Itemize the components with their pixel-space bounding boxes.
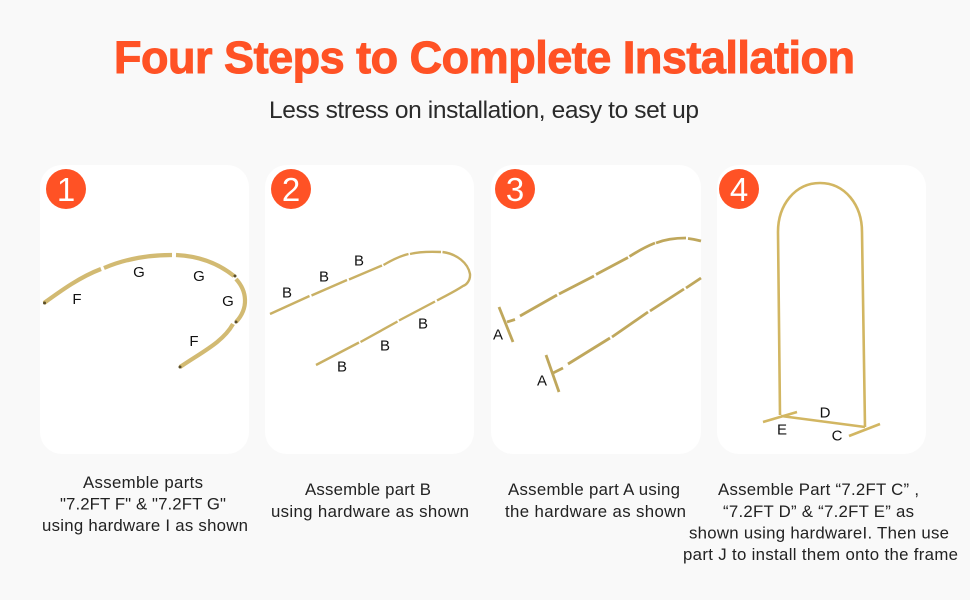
caption: step 4: Assemble Part “7.2FT C” , — [718, 480, 919, 499]
part labels: G — [193, 268, 205, 285]
caption: step 2: using hardware as shown — [271, 502, 469, 521]
panel: step 3 — [491, 165, 701, 454]
part labels: F — [189, 333, 199, 350]
diagram: parts F and G — [43, 255, 245, 368]
caption: step 3: Assemble part A using — [508, 480, 680, 499]
subtitle: Less stress on installation, easy to set up — [269, 97, 699, 124]
badge: step 4 — [719, 169, 759, 209]
caption: step 3: the hardware as shown — [505, 502, 686, 521]
part labels: G — [133, 264, 145, 281]
caption: step 4: “7.2FT D” & “7.2FT E” as — [723, 502, 914, 521]
diagram: part A — [499, 238, 701, 392]
part labels: B — [319, 268, 329, 286]
part labels: F — [72, 291, 82, 308]
part labels: B — [282, 284, 292, 302]
caption: step 4 — [683, 480, 958, 564]
badge: step 1 — [46, 169, 86, 209]
panel: step 4 — [717, 165, 926, 454]
caption: step 1: Assemble parts — [83, 473, 203, 492]
badge: step 3: 3 — [506, 171, 524, 208]
part labels: B — [418, 316, 428, 332]
part labels — [493, 326, 547, 390]
part labels — [72, 264, 234, 350]
title: Four Steps to Complete Installation — [114, 32, 855, 83]
caption: step 1: "7.2FT F" & "7.2FT G" — [60, 494, 226, 514]
part labels: A — [493, 326, 503, 344]
part labels: B — [337, 358, 347, 376]
part labels — [282, 252, 428, 376]
badge: step 2 — [271, 169, 311, 209]
diagram: assembled arch — [763, 183, 880, 436]
caption: step 1: using hardware I as shown — [42, 516, 248, 535]
caption: step 3 — [505, 480, 686, 521]
badge: step 1: 1 — [57, 171, 75, 208]
part labels: E — [777, 422, 787, 438]
diagram: part B — [270, 252, 470, 365]
caption: step 4: part J to install them onto the frame — [683, 545, 958, 564]
part labels — [777, 404, 843, 444]
caption: step 2 — [271, 480, 469, 521]
badge: step 4: 4 — [730, 171, 748, 208]
part labels: B — [354, 252, 364, 270]
badge: step 2: 2 — [282, 171, 300, 208]
panel: step 1 — [40, 165, 249, 454]
caption: step 1 — [42, 473, 248, 535]
part labels: G — [222, 293, 234, 310]
part labels: A — [537, 372, 547, 390]
caption: step 2: Assemble part B — [305, 480, 431, 499]
caption: step 4: shown using hardwareI. Then use — [689, 524, 949, 542]
part labels: B — [380, 338, 390, 354]
badge: step 3 — [495, 169, 535, 209]
part labels: D — [820, 404, 831, 422]
panel: step 2 — [265, 165, 474, 454]
part labels: C — [832, 428, 843, 444]
